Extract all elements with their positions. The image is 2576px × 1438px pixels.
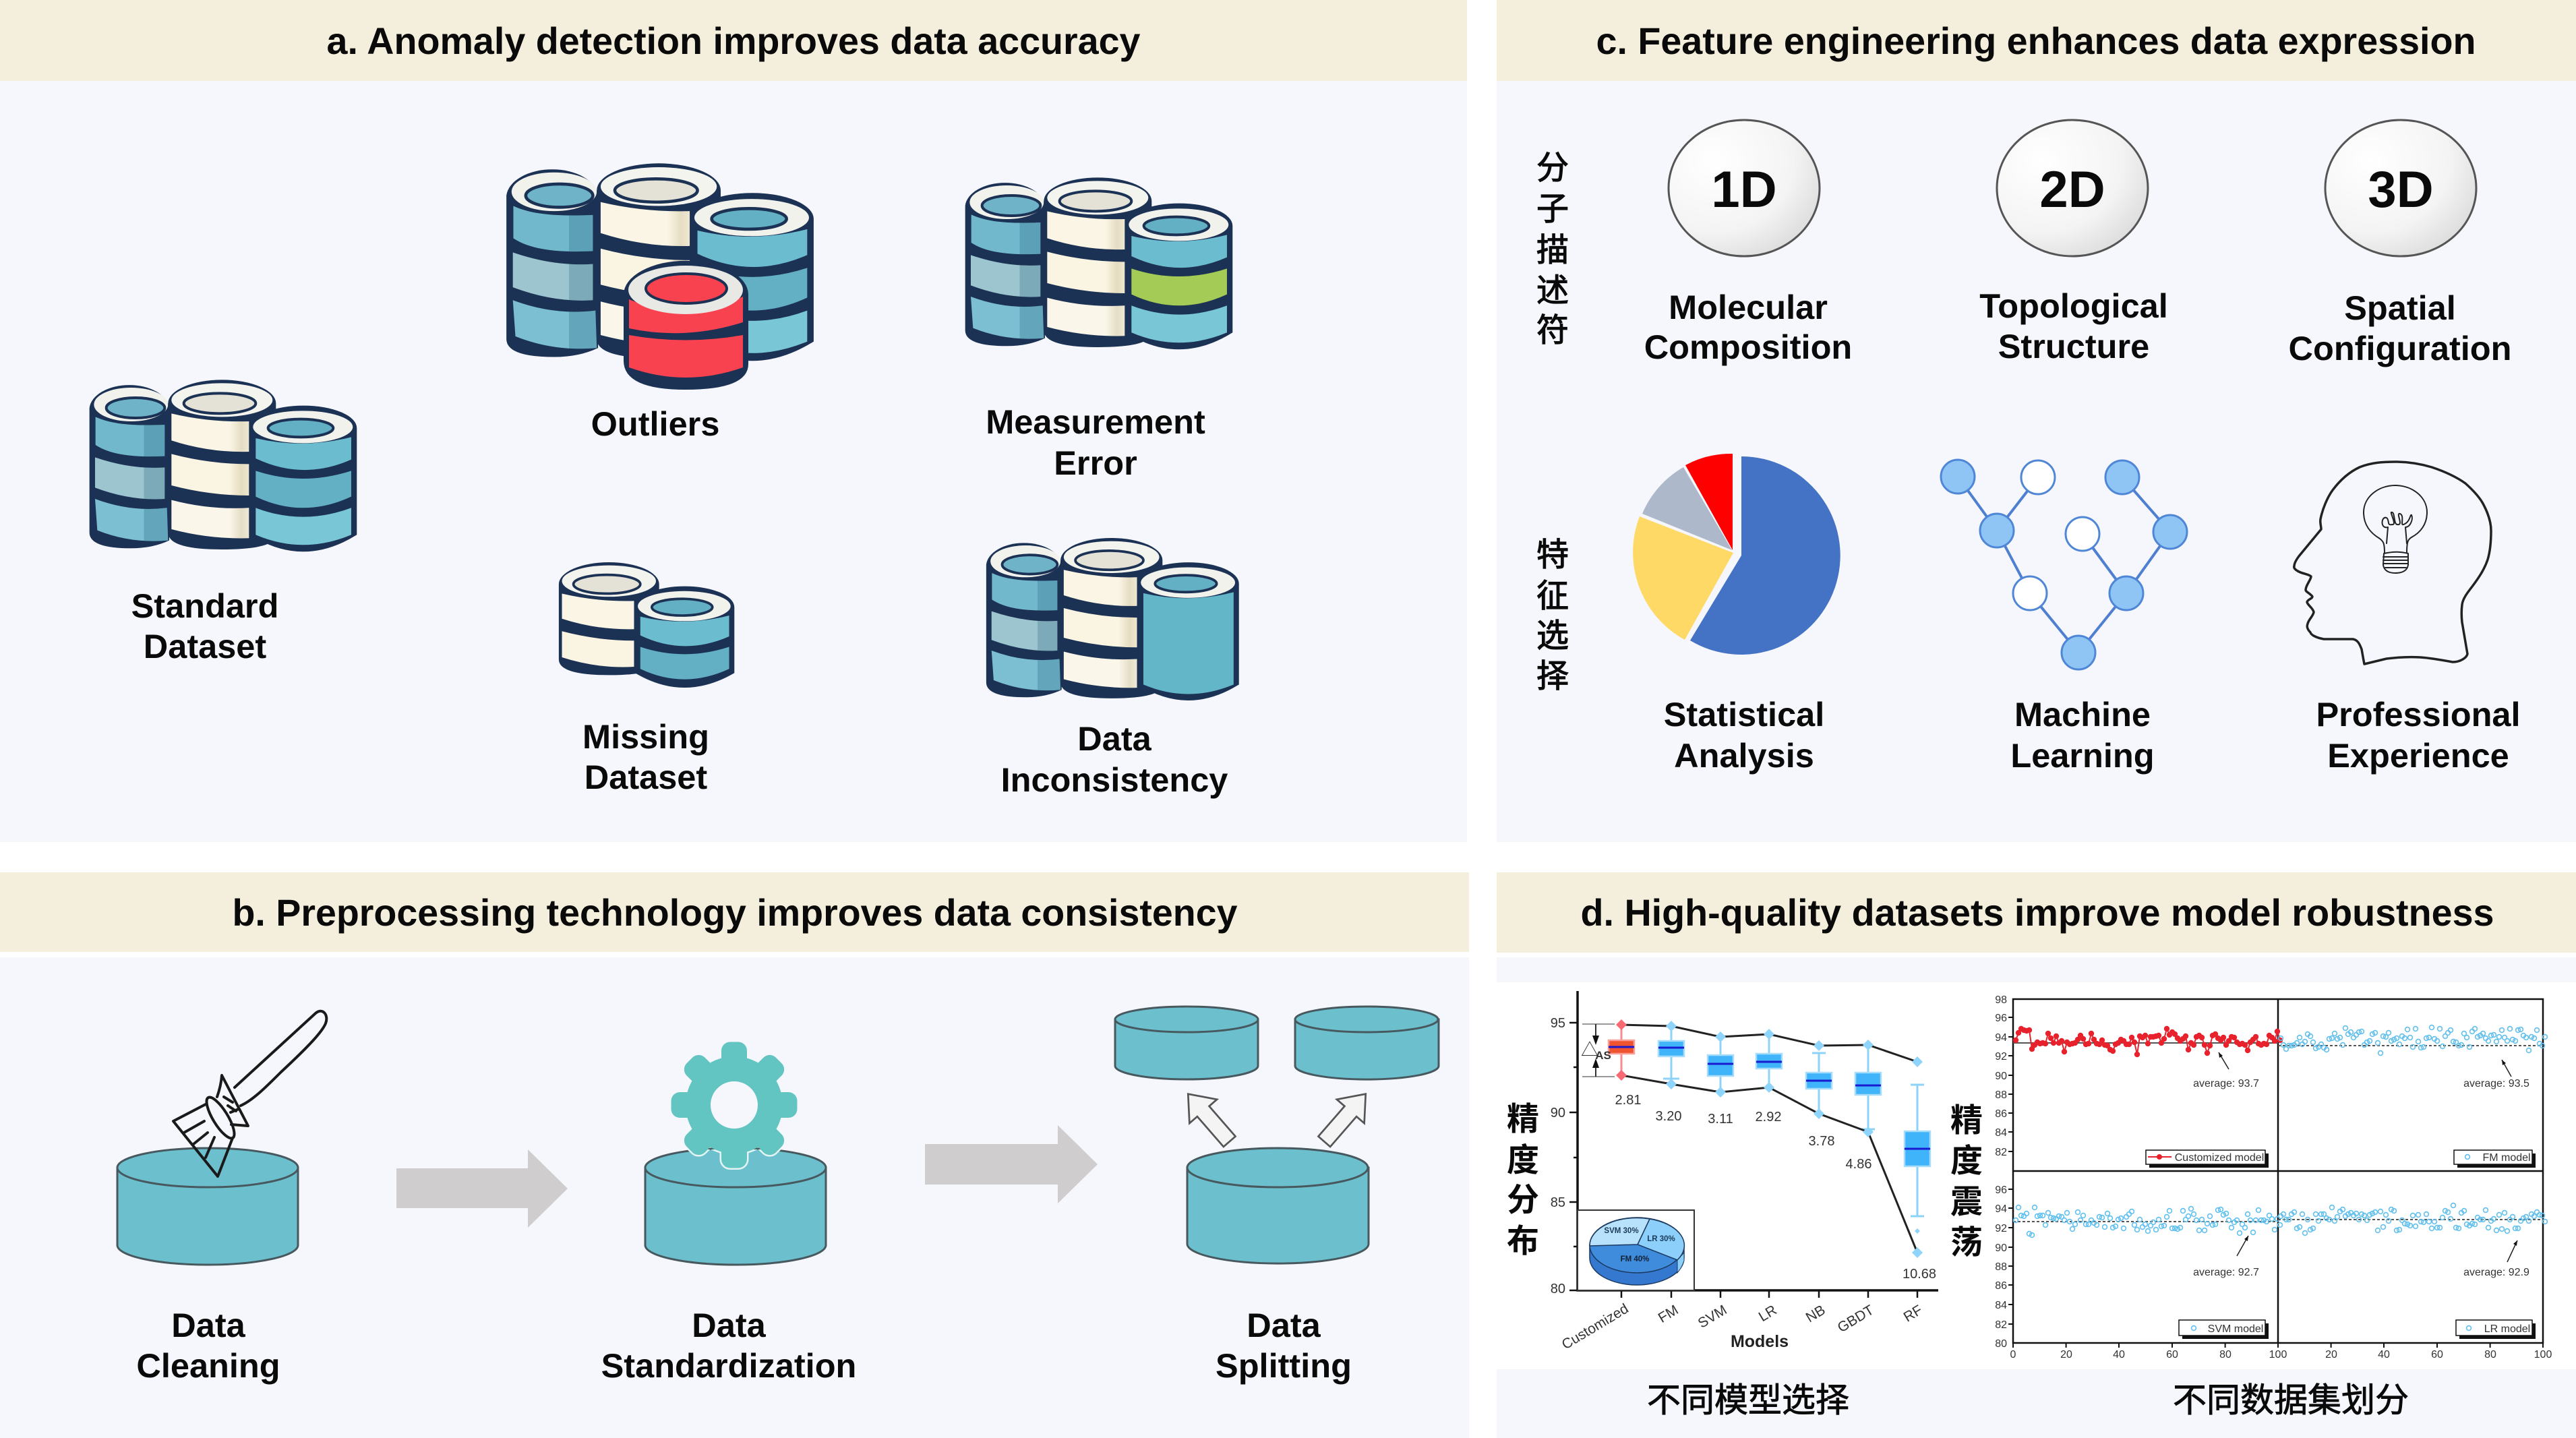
y axis values: 92 bbox=[1995, 1051, 2007, 1062]
arrow: cleaning to standardization bbox=[396, 1149, 568, 1228]
x axis model labels: Customized bbox=[1559, 1301, 1631, 1352]
medians bbox=[1609, 1047, 1930, 1149]
legend: FM model bbox=[2454, 1150, 2536, 1168]
label: missing dataset bbox=[582, 717, 709, 796]
x axis values: 40 bbox=[2378, 1349, 2390, 1360]
heading a: a. Anomaly detection improves data accuracy bbox=[326, 20, 1141, 62]
label: data splitting bbox=[1216, 1306, 1352, 1385]
label: molecular descriptors (vertical): 描 bbox=[1536, 233, 1569, 268]
label: professional experience: Experience bbox=[2327, 736, 2509, 775]
icon: machine learning tree bbox=[1941, 460, 2187, 669]
x axis model labels: SVM bbox=[1696, 1302, 1730, 1331]
legend: customized model: Customized model bbox=[2175, 1152, 2264, 1164]
icon: data splitting source cylinder bbox=[1187, 1148, 1369, 1263]
x axis values: 60 bbox=[2166, 1349, 2178, 1360]
y axis values: 82 bbox=[1995, 1147, 2007, 1158]
label: data inconsistency bbox=[1001, 719, 1228, 799]
x axis title: Models bbox=[1731, 1332, 1789, 1351]
inset: 3D pie of split ratios: SVM 30% bbox=[1604, 1227, 1639, 1235]
y axis values: 86 bbox=[1995, 1280, 2007, 1292]
legend: LR model bbox=[2456, 1320, 2536, 1339]
label: accuracy distribution (vertical): 分 bbox=[1507, 1182, 1539, 1218]
heading d: d. High-quality datasets improve model robustness bbox=[1580, 891, 2494, 934]
label: data cleaning: Data bbox=[171, 1306, 246, 1344]
label: measurement error bbox=[986, 402, 1205, 482]
icon: measurement error cylinders with green band bbox=[965, 177, 1232, 349]
icon: 2D disc: 2D bbox=[2039, 161, 2105, 218]
frames and ticks bbox=[2008, 999, 2543, 1348]
label: data inconsistency: Data bbox=[1077, 719, 1152, 758]
label: data standardization bbox=[601, 1306, 856, 1385]
legend: SVM model bbox=[2179, 1320, 2269, 1339]
boxes bbox=[1609, 1040, 1930, 1166]
caption: different model selection: 不同模型选择 bbox=[1647, 1381, 1849, 1419]
y axis values: 84 bbox=[1995, 1127, 2007, 1139]
label: spatial configuration: Configuration bbox=[2288, 329, 2512, 367]
icon: 1D disc bbox=[1669, 120, 1820, 256]
icon: gear bbox=[671, 1042, 797, 1168]
icon: split output cylinder left bbox=[1115, 1007, 1258, 1079]
y axis values: 80 bbox=[1551, 1282, 1565, 1296]
legend: customized model bbox=[2146, 1150, 2269, 1168]
label: accuracy distribution (vertical): 度 bbox=[1507, 1143, 1539, 1178]
y axis values: 96 bbox=[1995, 1013, 2007, 1024]
x axis values: 100 bbox=[2534, 1349, 2552, 1360]
panel c: feature engineering bbox=[1497, 0, 2576, 842]
label: molecular descriptors (vertical): 符 bbox=[1536, 313, 1569, 349]
range lines bbox=[1621, 1025, 1917, 1253]
value labels: 2.81 bbox=[1615, 1093, 1641, 1108]
label: molecular composition: Molecular bbox=[1669, 288, 1828, 326]
x axis values: 0 bbox=[2010, 1349, 2016, 1360]
label: molecular descriptors (vertical): 述 bbox=[1536, 273, 1569, 309]
delta AS annotation: AS bbox=[1595, 1049, 1611, 1062]
delta AS annotation bbox=[1581, 1024, 1615, 1077]
heading b bbox=[0, 872, 1469, 952]
label: topological structure: Topological bbox=[1979, 287, 2168, 325]
x axis values bbox=[2010, 1349, 2552, 1360]
legend: FM model: FM model bbox=[2482, 1152, 2531, 1164]
caption: different dataset splits: 不同数据集划分 bbox=[2173, 1381, 2409, 1419]
label: machine learning: Learning bbox=[2010, 736, 2155, 775]
y axis values: 90 bbox=[1551, 1106, 1565, 1120]
label: professional experience: Professional bbox=[2316, 695, 2521, 733]
y axis values: 98 bbox=[1995, 994, 2007, 1006]
heading c bbox=[1497, 0, 2576, 81]
label: standard dataset bbox=[131, 587, 278, 665]
y axis values: 88 bbox=[1995, 1089, 2007, 1101]
label: feature selection (vertical) bbox=[1536, 537, 1569, 694]
icon: missing dataset cylinders bbox=[559, 562, 734, 688]
whiskers bbox=[1621, 1025, 1924, 1216]
label: data inconsistency: Inconsistency bbox=[1001, 760, 1228, 799]
label: accuracy oscillation (vertical) bbox=[1950, 1103, 1983, 1261]
arrow: split up-right bbox=[1311, 1082, 1379, 1154]
value labels: 2.92 bbox=[1756, 1110, 1781, 1125]
legend: SVM model: SVM model bbox=[2208, 1323, 2263, 1335]
label: measurement error: Error bbox=[1054, 444, 1137, 482]
label: accuracy oscillation (vertical): 精 bbox=[1950, 1103, 1983, 1139]
x axis values: 60 bbox=[2431, 1349, 2443, 1360]
icon: 2D disc bbox=[1997, 120, 2148, 256]
arrow: split up-left bbox=[1174, 1082, 1243, 1154]
label: standard dataset: Standard bbox=[131, 587, 278, 625]
delta AS annotation: △ bbox=[1581, 1040, 1598, 1060]
label: professional experience bbox=[2316, 695, 2521, 775]
x axis values: 100 bbox=[2269, 1349, 2287, 1360]
average annotations: average: 93.7 bbox=[2193, 1078, 2259, 1089]
value labels: 10.68 bbox=[1903, 1267, 1936, 1282]
label: data splitting: Data bbox=[1247, 1306, 1321, 1344]
heading a bbox=[0, 0, 1467, 81]
y axis values: 94 bbox=[1995, 1032, 2007, 1044]
icon: 1D disc: 1D bbox=[1711, 161, 1777, 218]
panel b: preprocessing bbox=[0, 872, 1469, 1438]
series: FM model bbox=[2278, 1027, 2545, 1053]
label: feature selection (vertical): 选 bbox=[1536, 618, 1569, 654]
y axis values: 85 bbox=[1551, 1195, 1565, 1210]
label: feature selection (vertical): 择 bbox=[1536, 659, 1569, 694]
y axis values: 88 bbox=[1995, 1261, 2007, 1273]
x axis values: 20 bbox=[2060, 1349, 2072, 1360]
chart: accuracy across dataset splits bbox=[1995, 994, 2552, 1360]
label: feature selection (vertical): 征 bbox=[1536, 578, 1569, 614]
icon: standard dataset cylinders bbox=[90, 380, 357, 551]
label: spatial configuration: Spatial bbox=[2344, 289, 2456, 327]
average annotations: average: 92.7 bbox=[2193, 1267, 2259, 1278]
icon: data inconsistency cylinders bbox=[986, 538, 1239, 700]
chart: accuracy distribution box plot bbox=[1551, 991, 1938, 1352]
inset: 3D pie of split ratios: LR 30% bbox=[1647, 1235, 1675, 1243]
label: molecular descriptors (vertical): 分 bbox=[1536, 150, 1569, 186]
panel d: model robustness bbox=[1497, 872, 2576, 1438]
y axis values: 90 bbox=[1995, 1242, 2007, 1254]
x axis model labels: LR bbox=[1756, 1302, 1780, 1325]
icon: outliers cylinders with red outlier bbox=[506, 163, 814, 390]
series: customized model bbox=[2013, 1029, 2280, 1054]
label: feature selection (vertical): 特 bbox=[1536, 537, 1569, 573]
label: spatial configuration bbox=[2288, 289, 2512, 367]
series: SVM model bbox=[2013, 1207, 2280, 1235]
label: accuracy oscillation (vertical): 震 bbox=[1950, 1185, 1983, 1220]
axes and ticks bbox=[1569, 991, 1938, 1298]
label: accuracy oscillation (vertical): 荡 bbox=[1950, 1225, 1983, 1261]
label: statistical analysis: Statistical bbox=[1664, 695, 1824, 733]
icon: split output cylinder right bbox=[1295, 1007, 1439, 1079]
x axis model labels: RF bbox=[1901, 1302, 1925, 1325]
label: machine learning bbox=[2010, 695, 2155, 775]
value labels: 4.86 bbox=[1846, 1157, 1871, 1172]
label: data cleaning bbox=[136, 1306, 280, 1385]
value labels: 3.78 bbox=[1809, 1134, 1834, 1149]
panel a: anomaly detection bbox=[0, 0, 1467, 842]
inset: 3D pie of split ratios: FM 40% bbox=[1621, 1255, 1649, 1263]
label: missing dataset: Dataset bbox=[585, 758, 707, 796]
label: molecular composition bbox=[1644, 288, 1852, 366]
label: measurement error: Measurement bbox=[986, 402, 1205, 441]
average annotations: average: 93.5 bbox=[2463, 1078, 2529, 1089]
heading c: c. Feature engineering enhances data expression bbox=[1596, 20, 2476, 62]
x axis values: 20 bbox=[2325, 1349, 2337, 1360]
y axis values: 94 bbox=[1995, 1203, 2007, 1215]
average annotations bbox=[2193, 1052, 2529, 1278]
icon: head with light bulb bbox=[2294, 462, 2491, 664]
label: topological structure bbox=[1979, 287, 2168, 365]
value labels bbox=[1615, 1093, 1936, 1282]
label: data cleaning: Cleaning bbox=[136, 1346, 280, 1385]
heading b: b. Preprocessing technology improves data consistency bbox=[232, 891, 1238, 934]
label: accuracy distribution (vertical) bbox=[1507, 1102, 1539, 1259]
icon: brush bbox=[173, 1011, 326, 1176]
label: data standardization: Standardization bbox=[601, 1346, 856, 1385]
x axis values: 40 bbox=[2113, 1349, 2125, 1360]
x axis model labels: FM bbox=[1656, 1302, 1681, 1326]
y axis values: 96 bbox=[1995, 1185, 2007, 1196]
label: molecular descriptors (vertical) bbox=[1536, 150, 1569, 349]
label: data splitting: Splitting bbox=[1216, 1346, 1352, 1385]
chart: statistical analysis pie bbox=[1633, 454, 1840, 655]
y axis values: 84 bbox=[1995, 1300, 2007, 1311]
y axis values: 92 bbox=[1995, 1223, 2007, 1234]
icon: 3D disc bbox=[2325, 120, 2476, 256]
label: missing dataset: Missing bbox=[582, 717, 709, 756]
label: outliers: Outliers bbox=[591, 405, 719, 443]
label: statistical analysis: Analysis bbox=[1674, 736, 1814, 775]
label: data standardization: Data bbox=[692, 1306, 767, 1344]
label: accuracy distribution (vertical): 精 bbox=[1507, 1102, 1539, 1137]
arrow: standardization to splitting bbox=[925, 1125, 1098, 1203]
x axis model labels bbox=[1559, 1301, 1925, 1352]
value labels: 3.11 bbox=[1708, 1112, 1733, 1127]
y axis values: 90 bbox=[1995, 1071, 2007, 1082]
label: molecular composition: Composition bbox=[1644, 328, 1852, 366]
x axis model labels: NB bbox=[1803, 1302, 1828, 1325]
inset: 3D pie of split ratios bbox=[1578, 1210, 1694, 1290]
y axis values: 80 bbox=[1995, 1338, 2007, 1350]
x axis values: 80 bbox=[2219, 1349, 2231, 1360]
y axis values bbox=[1995, 994, 2007, 1350]
label: molecular descriptors (vertical): 子 bbox=[1536, 191, 1569, 227]
label: accuracy distribution (vertical): 布 bbox=[1507, 1224, 1539, 1259]
label: topological structure: Structure bbox=[1998, 327, 2149, 365]
label: standard dataset: Dataset bbox=[144, 627, 266, 665]
y axis values bbox=[1551, 1016, 1565, 1296]
icon: data cleaning cylinder bbox=[117, 1148, 298, 1265]
y axis values: 82 bbox=[1995, 1319, 2007, 1331]
heading d bbox=[1497, 872, 2576, 953]
label: accuracy oscillation (vertical): 度 bbox=[1950, 1143, 1983, 1179]
y axis values: 86 bbox=[1995, 1108, 2007, 1120]
legend: LR model: LR model bbox=[2484, 1323, 2530, 1335]
label: machine learning: Machine bbox=[2014, 695, 2151, 733]
x axis values: 80 bbox=[2484, 1349, 2496, 1360]
icon: data standardization cylinder bbox=[645, 1148, 826, 1265]
average annotations: average: 92.9 bbox=[2463, 1267, 2529, 1278]
icon: 3D disc: 3D bbox=[2368, 161, 2434, 218]
series: LR model bbox=[2278, 1205, 2545, 1233]
label: statistical analysis bbox=[1664, 695, 1824, 775]
y axis values: 95 bbox=[1551, 1016, 1565, 1031]
value labels: 3.20 bbox=[1656, 1109, 1681, 1124]
diamonds bbox=[1616, 1019, 1923, 1258]
x axis model labels: GBDT bbox=[1835, 1302, 1877, 1336]
